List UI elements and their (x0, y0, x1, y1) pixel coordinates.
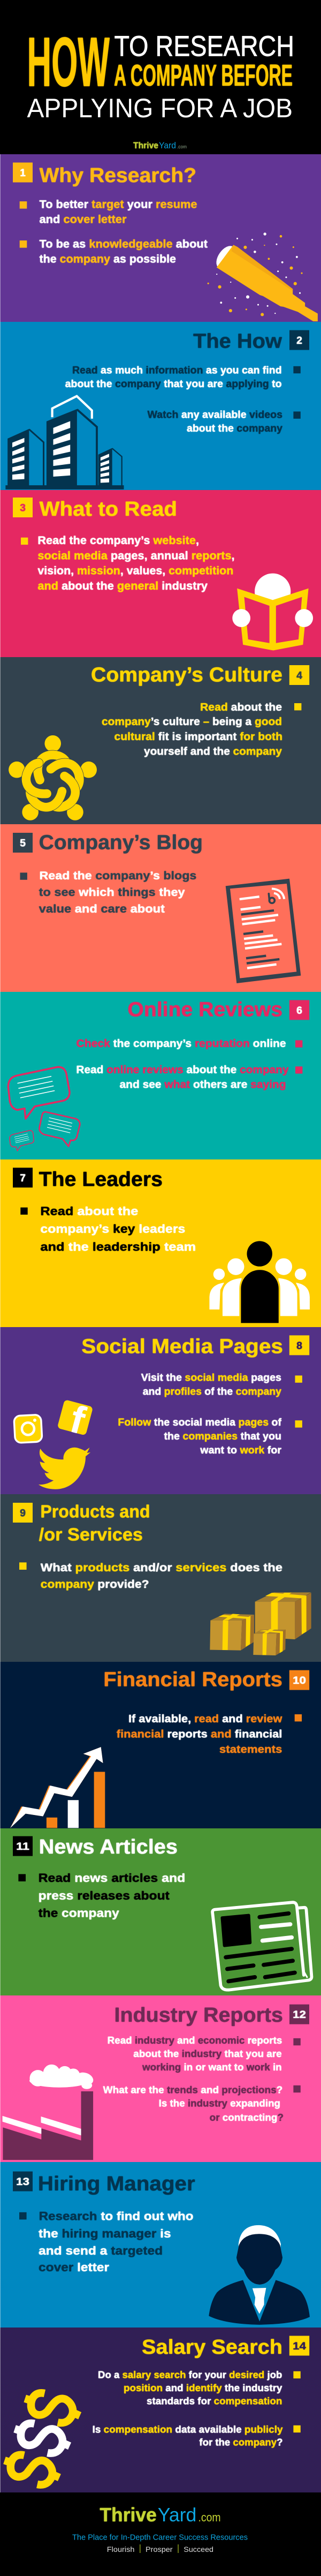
heading: What to Read: What to Read (40, 498, 177, 521)
icon: blog document (226, 879, 301, 983)
text block: why research bullets: To better target your resume (40, 198, 197, 210)
badge 5 (13, 833, 33, 853)
text block: industry: Is the industry expanding (159, 2097, 280, 2108)
text block: salary: Do a salary search for your desired job (98, 2369, 282, 2380)
motto: Prosper (146, 2545, 173, 2554)
text block: social media: the companies that you (164, 1430, 281, 1442)
text block: products: What products and/or services does the (41, 1562, 282, 1574)
text block: news (18, 1871, 185, 1919)
text block: hiring manager: the hiring manager is (39, 2227, 171, 2240)
text block: culture: yourself and the company (144, 745, 282, 757)
text block: industry: working in or want to work in (142, 2061, 282, 2073)
text block: industry: What are the trends and projections? (103, 2084, 282, 2095)
text block: why research bullets: the company as possible (40, 253, 176, 266)
badge 4: 4 (296, 669, 302, 681)
badge 7: 7 (20, 1172, 26, 1184)
icon: newspaper (212, 1902, 311, 1990)
icon: telescope (208, 232, 318, 321)
text block: social media: and profiles of the company (143, 1385, 281, 1397)
heading: Hiring Manager: Hiring Manager (38, 2173, 195, 2195)
text block: industry: or contracting? (210, 2112, 284, 2123)
logo: ThriveYard header: .com (177, 144, 187, 149)
panel: 2 the how (0, 322, 321, 490)
logo: ThriveYard header: Yard (159, 140, 176, 150)
chart: rising bars and arrow (10, 1747, 105, 1828)
heading: Online Reviews: Online Reviews (127, 999, 282, 1021)
text block: salary: Is compensation data available publicly (93, 2424, 283, 2435)
text block: salary: position and identify the industry (124, 2382, 282, 2393)
text block: social media: want to work for (200, 1444, 281, 1456)
heading: The How: The How (193, 330, 282, 353)
text block: hiring manager: Research to find out who (39, 2209, 194, 2223)
panel: 11 news articles (0, 1828, 321, 1995)
badge 10 (289, 1670, 309, 1690)
logo: ThriveYard footer: Thrive (100, 2504, 157, 2526)
panel: 8 social media pages (0, 1327, 321, 1494)
text block: leaders: Read about the (40, 1204, 138, 1218)
title: APPLYING FOR A JOB (27, 93, 293, 123)
text block: financial (117, 1713, 302, 1756)
panel: 10 financial reports (0, 1662, 321, 1828)
text block: what to read: social media pages, annual reports, (37, 549, 235, 562)
heading: Products and/or Services: Products and (40, 1502, 150, 1522)
panel: 9 products and services (0, 1494, 321, 1662)
text block: what to read: and about the general industry (37, 580, 208, 592)
badge 8 (289, 1335, 309, 1355)
logo: ThriveYard footer: Yard (158, 2504, 196, 2526)
panel: 3 what to read (0, 490, 321, 657)
text block: products (19, 1562, 282, 1591)
text block: the how bullets (65, 365, 301, 434)
badge 2: 2 (296, 335, 302, 347)
icon: leader group (209, 1241, 310, 1324)
text block: culture: cultural fit is important for both (114, 731, 282, 743)
icon: social media logos (14, 1395, 95, 1489)
heading: The Leaders: The Leaders (39, 1169, 163, 1191)
text block: products: company provide? (41, 1578, 149, 1591)
text block: social media: Follow the social media pages of (118, 1417, 282, 1428)
icon: team circle (9, 735, 97, 820)
text block: blog: to see which things they (39, 886, 185, 899)
text block: industry: about the industry that you are (133, 2048, 282, 2059)
badge 9 (13, 1503, 33, 1523)
icon: person reading (232, 574, 313, 651)
panel: 7 the leaders (0, 1159, 321, 1327)
text block: news: Read news articles and (39, 1871, 185, 1885)
icon: social media logos: f (66, 1397, 90, 1443)
text block: the how bullets: about the company that you are applying to (65, 378, 282, 390)
icon: office buildings (5, 396, 124, 489)
text block: culture: Read about the (200, 702, 282, 713)
badge 1: 1 (20, 167, 26, 179)
icon: dollar signs (4, 2393, 80, 2485)
text block: why research bullets (20, 198, 208, 266)
badge 11 (13, 1836, 33, 1856)
heading: Financial Reports: Financial Reports (103, 1669, 282, 1691)
badge 4 (289, 665, 309, 685)
badge 14: 14 (293, 2340, 306, 2352)
text block: culture (102, 702, 301, 757)
logo: ThriveYard footer: .com (198, 2511, 221, 2524)
text block: leaders (20, 1204, 196, 1253)
text block: news: the company (39, 1906, 120, 1919)
badge 6: 6 (296, 1005, 302, 1016)
text block: leaders: and the leadership team (40, 1240, 196, 1253)
logo: ThriveYard footer (100, 2504, 221, 2526)
text block: industry: Read industry and economic reports (108, 2035, 282, 2046)
text block: hiring manager: cover letter (39, 2261, 109, 2274)
text block: salary (93, 2369, 301, 2448)
text block: blog (20, 869, 196, 915)
text block: news: press releases about (39, 1889, 170, 1902)
badge 8: 8 (296, 1340, 302, 1352)
text block: what to read (21, 534, 235, 592)
badge 6 (289, 1000, 309, 1020)
text block: hiring manager (19, 2209, 194, 2274)
text block: the how bullets: about the company (187, 423, 282, 434)
text block: why research bullets: and cover letter (40, 213, 126, 225)
badge 12: 12 (293, 2009, 306, 2021)
title: HOW (27, 22, 110, 101)
panel: 12 industry reports (0, 1995, 321, 2162)
panel: 14 salary search (0, 2328, 321, 2492)
text block: financial: statements (219, 1744, 282, 1756)
text block: salary: for the company? (199, 2437, 282, 2448)
text block: online reviews (76, 1038, 302, 1090)
text block: financial: If available, read and review (128, 1713, 282, 1725)
panel: header (0, 0, 321, 154)
icon: factory (3, 2065, 95, 2160)
badge 3 (13, 498, 33, 517)
badge 10: 10 (293, 1675, 306, 1686)
icon: speech bubbles (8, 1067, 80, 1151)
text block: culture: company’s culture – being a good (102, 716, 282, 728)
title: TO RESEARCH (114, 30, 294, 62)
icon: gift boxes (210, 1592, 311, 1655)
heading: Products and/or Services (39, 1502, 150, 1545)
text block: online reviews: Check the company’s reputation online (77, 1038, 286, 1050)
panel: 6 online reviews (0, 992, 321, 1159)
panel: 13 hiring manager (0, 2162, 321, 2328)
logo: ThriveYard header (133, 140, 187, 150)
text block: leaders: company’s key leaders (40, 1222, 185, 1236)
text block: online reviews: Read online reviews about the company (76, 1064, 289, 1076)
title (27, 22, 294, 123)
text block: salary: standards for compensation (147, 2395, 282, 2406)
text block: social media: Visit the social media pages (141, 1372, 281, 1383)
heading: News Articles: News Articles (39, 1836, 178, 1858)
text block: industry (103, 2035, 301, 2123)
text block: the how bullets: Watch any available videos (148, 409, 282, 420)
heading: Industry Reports: Industry Reports (114, 2004, 283, 2027)
badge 7 (13, 1168, 33, 1187)
badge 11: 11 (16, 1841, 29, 1852)
heading: Salary Search: Salary Search (142, 2336, 282, 2359)
text block: online reviews: and see what others are saying (120, 1079, 286, 1090)
badge 13 (13, 2172, 33, 2191)
logo: ThriveYard header: Thrive (133, 140, 158, 150)
heading: Social Media Pages: Social Media Pages (81, 1335, 283, 1358)
panel: footer (0, 2492, 321, 2576)
text block: financial: financial reports and financial (117, 1729, 282, 1741)
motto (107, 2544, 213, 2554)
panel: 1 why research (0, 154, 321, 322)
icon: manager silhouette (209, 2225, 310, 2325)
badge 9: 9 (20, 1507, 26, 1519)
tagline: The Place for In-Depth Career Success Resources (72, 2534, 248, 2542)
text block: what to read: vision, mission, values, competition (37, 565, 233, 577)
text block: what to read: Read the company’s website, (37, 534, 199, 547)
motto: Succeed (184, 2545, 213, 2554)
text block: the how bullets: Read as much information as you can find (72, 365, 282, 376)
badge 14 (289, 2336, 309, 2355)
text block: blog: value and care about (39, 902, 165, 915)
heading: Company's Culture: Company’s Culture (91, 664, 282, 687)
heading: Why Research?: Why Research? (40, 164, 196, 187)
heading: Company's Blog: Company’s Blog (39, 832, 203, 854)
badge 1 (13, 163, 33, 182)
badge 2 (289, 330, 309, 350)
text block: why research bullets: To be as knowledgeable about (40, 238, 208, 250)
panel: 4 company's culture (0, 657, 321, 824)
badge 5: 5 (20, 838, 26, 849)
text block: blog: Read the company ’s blogs (40, 869, 196, 882)
badge 12 (289, 2005, 309, 2024)
heading: Products and/or Services: /or Services (39, 1524, 143, 1545)
badge 13: 13 (16, 2176, 29, 2188)
badge 3: 3 (20, 502, 26, 514)
text block: hiring manager: and send a targeted (39, 2244, 163, 2257)
panel: 5 company's blog (0, 824, 321, 992)
text block: social media (118, 1372, 302, 1456)
motto: Flourish (107, 2545, 134, 2554)
